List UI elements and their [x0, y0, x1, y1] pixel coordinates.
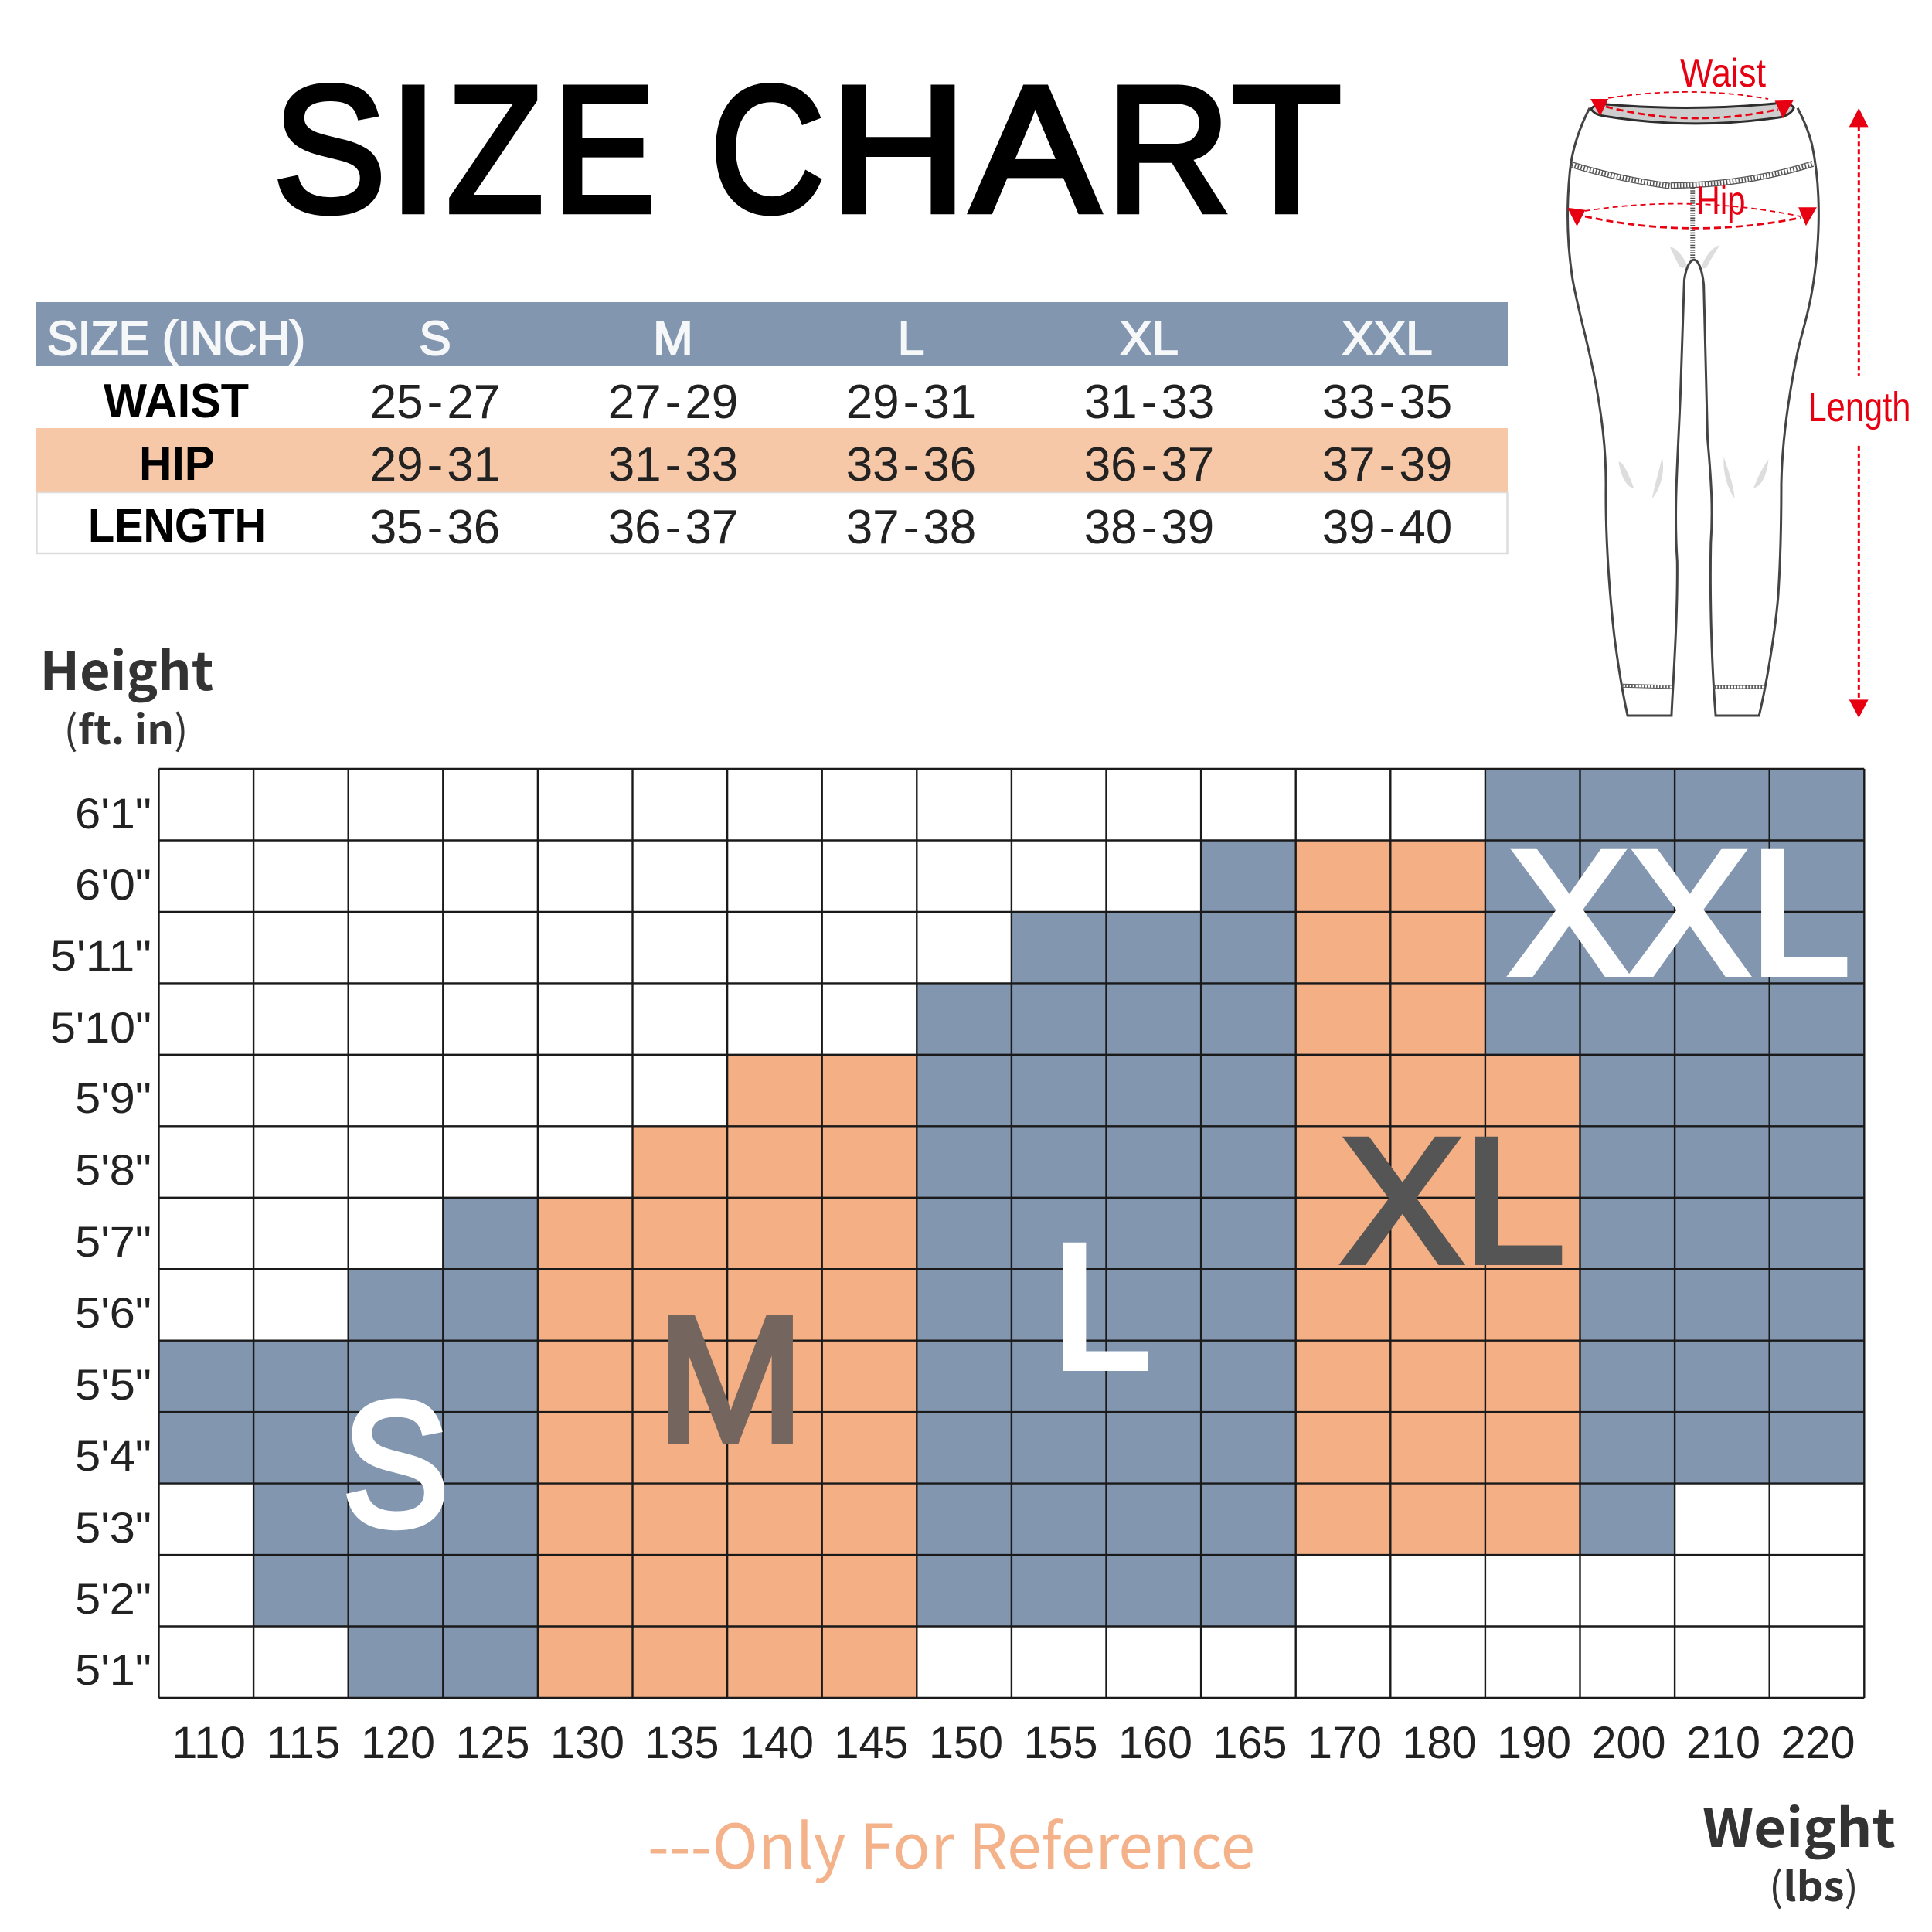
- region: size M: [538, 1055, 917, 1698]
- x-axis labels: weights: 145: [835, 1718, 909, 1768]
- x-axis labels: weights: 210: [1686, 1718, 1760, 1768]
- label: hip: Hip: [1697, 179, 1745, 223]
- table row: waist: 25-27: [370, 376, 500, 429]
- panel: size measurement table: [36, 302, 1508, 554]
- x-axis labels: weights: 180: [1402, 1718, 1476, 1768]
- table row: waist: 31-33: [1084, 376, 1214, 429]
- axis title: height: [40, 629, 213, 756]
- table row: waist: 29-31: [846, 376, 976, 429]
- table row: waist: WAIST: [104, 375, 249, 428]
- table row: hip: 37-39: [1322, 438, 1452, 492]
- title: S: [274, 49, 386, 250]
- table row: length: 37-38: [846, 501, 976, 554]
- table row: length: 35-36: [370, 501, 500, 554]
- x-axis labels: weights: 140: [740, 1718, 814, 1768]
- table row: hip: 31-33: [608, 438, 738, 492]
- leggings outline: [1568, 103, 1818, 716]
- title: A: [971, 49, 1099, 250]
- x-axis labels: weights: 110: [172, 1718, 246, 1768]
- table header row: M: [653, 312, 693, 366]
- size label: XL: XL: [1341, 1101, 1565, 1300]
- x-axis labels: weights: 155: [1023, 1718, 1097, 1768]
- y-axis labels: heights: 5'9": [75, 1073, 151, 1122]
- table row: hip: 29-31: [370, 438, 500, 492]
- table row: waist: 27-29: [608, 376, 738, 429]
- y-axis labels: heights: 5'10": [50, 1003, 151, 1052]
- y-axis labels: heights: 5'11": [50, 931, 151, 980]
- table row: length: LENGTH: [88, 499, 266, 553]
- x-axis labels: weights: [172, 1718, 1855, 1768]
- x-axis labels: weights: 130: [550, 1718, 624, 1768]
- x-axis labels: weights: 160: [1118, 1718, 1192, 1768]
- y-axis labels: heights: 5'5": [75, 1360, 151, 1409]
- icon: leggings measurement diagram: [1567, 51, 1910, 718]
- title: T: [1232, 49, 1342, 250]
- axis title: height: Height: [40, 629, 213, 706]
- table row: hip: 33-36: [846, 438, 976, 492]
- table row: hip: HIP: [139, 437, 215, 491]
- title: C: [710, 49, 825, 250]
- axis title: weight: Weight: [1702, 1786, 1896, 1862]
- y-axis labels: heights: 5'4": [75, 1431, 151, 1480]
- title: I: [388, 49, 438, 250]
- axis title: height: (ft. in): [63, 698, 189, 756]
- axis title: weight: (lbs): [1769, 1855, 1859, 1913]
- region: size XXL: [1485, 769, 1864, 1555]
- table row: length: 39-40: [1322, 501, 1452, 554]
- y-axis labels: heights: 5'8": [75, 1145, 151, 1194]
- table header row: [36, 302, 1508, 366]
- size label: L: L: [1052, 1207, 1151, 1406]
- chart: height and weight size grid: [159, 769, 1864, 1698]
- table header row: XXL: [1342, 312, 1433, 366]
- x-axis labels: weights: 170: [1308, 1718, 1382, 1768]
- table header row: S: [419, 312, 451, 366]
- size label: S: S: [342, 1365, 449, 1563]
- y-axis labels: heights: 5'1": [75, 1645, 151, 1694]
- region: size XL: [1296, 841, 1580, 1555]
- axis title: weight: [1702, 1786, 1896, 1913]
- table row: waist: 33-35: [1322, 376, 1452, 429]
- x-axis labels: weights: 115: [266, 1718, 340, 1768]
- x-axis labels: weights: 150: [929, 1718, 1003, 1768]
- table header row: XL: [1120, 312, 1179, 366]
- table header row: L: [898, 312, 924, 366]
- table row: length: [37, 492, 1507, 554]
- region: size S: [159, 1198, 538, 1698]
- title: R: [1107, 49, 1230, 250]
- size label: XXL: XXL: [1509, 813, 1850, 1012]
- y-axis labels: heights: [50, 789, 151, 1694]
- y-axis labels: heights: 5'2": [75, 1574, 151, 1623]
- region: size L: [917, 841, 1296, 1626]
- x-axis labels: weights: 125: [456, 1718, 530, 1768]
- title: H: [830, 49, 968, 250]
- x-axis labels: weights: 200: [1592, 1718, 1666, 1768]
- y-axis labels: heights: 5'3": [75, 1503, 151, 1552]
- title: Z: [447, 49, 543, 250]
- label: length: Length: [1808, 384, 1910, 430]
- table row: hip: 36-37: [1084, 438, 1214, 492]
- y-axis labels: heights: 6'0": [75, 860, 151, 909]
- table row: length: 38-39: [1084, 501, 1214, 554]
- size label: M: M: [656, 1280, 804, 1478]
- y-axis labels: heights: 5'6": [75, 1288, 151, 1337]
- table row: length: 36-37: [608, 501, 738, 554]
- table header row: SIZE (INCH): [47, 312, 305, 366]
- title: E: [553, 49, 655, 250]
- x-axis labels: weights: 120: [361, 1718, 435, 1768]
- x-axis labels: weights: 165: [1213, 1718, 1287, 1768]
- y-axis labels: heights: 5'7": [75, 1217, 151, 1266]
- table row: hip: [36, 428, 1508, 492]
- x-axis labels: weights: 135: [645, 1718, 719, 1768]
- y-axis labels: heights: 6'1": [75, 789, 151, 838]
- x-axis labels: weights: 220: [1781, 1718, 1855, 1768]
- red measurement marks: waist, hip and length: [1567, 92, 1869, 718]
- footnote: only for reference: ---Only For Reference: [648, 1798, 1255, 1887]
- x-axis labels: weights: 190: [1497, 1718, 1571, 1768]
- label: waist: Waist: [1680, 51, 1766, 96]
- table row: waist: [36, 366, 1508, 429]
